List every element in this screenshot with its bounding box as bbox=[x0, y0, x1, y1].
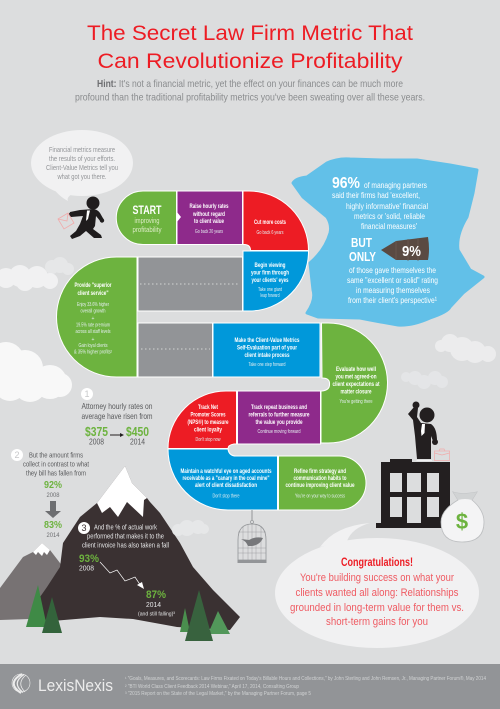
section 2: collected amount: 2 bbox=[14, 450, 20, 460]
row 1: start: without regard bbox=[192, 211, 225, 218]
subtitle hint: Hint: It's not a financial metric, yet the effect on your finances can be much more bbox=[97, 78, 403, 90]
row 5: final steps: alert of client dissatisfaction bbox=[195, 482, 257, 489]
row 1: start: improving bbox=[134, 216, 160, 225]
speech bubble: financial metrics: Financial metrics measure bbox=[49, 145, 115, 154]
section 2: collected amount: 83% bbox=[44, 520, 62, 531]
icon: law firm building bbox=[376, 459, 452, 528]
speech bubble: financial metrics: what got you there. bbox=[57, 172, 106, 181]
row 5: final steps: communication habits to bbox=[294, 475, 347, 482]
clouds right bbox=[401, 334, 496, 389]
row 5: final steps: Refine firm strategy and bbox=[294, 468, 346, 475]
row 2: grey spaces and client value: your firm through bbox=[251, 270, 289, 276]
speech bubble: congratulations: You're building success on what your bbox=[300, 572, 454, 584]
blue callout blob bbox=[293, 159, 483, 325]
row 2: grey spaces and client value: client intake process bbox=[244, 352, 290, 359]
row 5: final steps bbox=[168, 449, 366, 510]
speech bubble: congratulations bbox=[275, 523, 479, 648]
row 1: start: Raise hourly rates bbox=[190, 203, 229, 210]
row 3: evaluate: you met agreed-on bbox=[336, 374, 377, 380]
speech bubble: congratulations: grounded in long-term value for them vs. bbox=[290, 602, 464, 614]
mountains bbox=[0, 466, 240, 630]
row 2: grey spaces and client value: Gain loyal clients bbox=[78, 343, 108, 349]
row 4: track metrics: the value you provide bbox=[256, 419, 303, 426]
row 5: final steps: receivable as a "canary in the coal mine" bbox=[182, 475, 270, 482]
row 1: start: to client value bbox=[194, 218, 224, 225]
speech bubble: congratulations: Congratulations! bbox=[341, 555, 413, 569]
row 2: grey spaces and client value: & 35% higher profits² bbox=[74, 350, 112, 356]
9% statistic text: in measuring themselves bbox=[356, 285, 430, 295]
row 2: grey spaces and client value: Take one step forward bbox=[248, 362, 286, 368]
section 3: realization rate: 2008 bbox=[79, 564, 94, 572]
row 3: evaluate: You're getting there bbox=[340, 399, 373, 405]
section 3: realization rate: 2014 bbox=[146, 600, 161, 609]
footnotes: ² "BTI World Class Client Feedback 2014 Webinar," April 17, 2014, Consulting Group bbox=[125, 684, 299, 690]
icon: triumphant businessman bbox=[408, 402, 450, 461]
section 3: realization rate: client invoice has also taken a fall bbox=[82, 540, 169, 550]
96% statistic text: 96% bbox=[332, 175, 360, 192]
speech bubble: financial metrics: the results of your efforts. bbox=[49, 154, 115, 163]
section 2: collected amount: 2014 bbox=[46, 532, 60, 539]
row 1: start: Go back 20 years bbox=[195, 229, 223, 235]
96% statistic text: said their firms had 'excellent, bbox=[332, 190, 420, 200]
row 2: grey spaces and client value: your clients' eyes bbox=[252, 277, 289, 284]
row 3: evaluate: client expectations at bbox=[332, 381, 380, 388]
logo: LexisNexis bbox=[12, 674, 113, 695]
icon: trees bbox=[26, 585, 230, 641]
row 2: grey spaces and client value: Make the Client-Value Metrics bbox=[234, 337, 300, 344]
subtitle hint bbox=[75, 78, 425, 104]
9% statistic text bbox=[347, 265, 438, 305]
cloud on mountain bbox=[172, 520, 209, 536]
speech bubble: financial metrics bbox=[31, 130, 133, 201]
clouds left bbox=[0, 257, 74, 402]
row 1: start: START bbox=[132, 203, 162, 217]
section 1: attorney hourly rates: average have risen from bbox=[82, 411, 152, 421]
section 1: attorney hourly rates: $375 bbox=[85, 425, 108, 439]
row 4: track metrics: Track Net bbox=[198, 404, 218, 411]
row 2: grey spaces and client value: Begin viewing bbox=[254, 262, 286, 269]
row 2: grey spaces and client value: Provide "superior bbox=[74, 282, 112, 289]
row 2: grey spaces and client value: Take one giant bbox=[258, 287, 282, 293]
section 2: collected amount bbox=[11, 449, 90, 539]
section 3: realization rate bbox=[78, 522, 175, 618]
row 5: final steps: Maintain a watchful eye on aged accounts bbox=[180, 468, 272, 475]
row 4: track metrics: referrals to further measure bbox=[248, 412, 310, 418]
row 5: final steps: continue improving client value bbox=[286, 482, 355, 489]
row 2: grey spaces and client value: 19.5% rate premium bbox=[76, 322, 110, 328]
row 1: start bbox=[116, 191, 308, 250]
96% statistic text bbox=[332, 175, 428, 231]
row 5: final steps: You're on your way to success bbox=[295, 494, 345, 500]
title: Can Revolutionize Profitability bbox=[98, 50, 403, 73]
footnotes bbox=[125, 675, 486, 697]
row 2: grey spaces and client value: + bbox=[92, 337, 95, 343]
section 2: collected amount: But the amount firms bbox=[29, 450, 83, 460]
section 2: collected amount: they bill has fallen from bbox=[26, 468, 86, 478]
icon: money bag: $ bbox=[456, 509, 468, 534]
section 1: attorney hourly rates: 2008 bbox=[89, 438, 104, 446]
row 2: grey spaces and client value: Self-Evaluation part of your bbox=[237, 344, 297, 352]
row 2: grey spaces and client value: leap forward bbox=[260, 293, 280, 299]
9% statistic text: of those gave themselves the bbox=[349, 265, 436, 275]
section 3: realization rate: 93% bbox=[79, 553, 99, 565]
96% statistic text: financial measures' bbox=[361, 221, 417, 231]
footer bbox=[0, 664, 500, 709]
icon: running businessman with briefcase bbox=[58, 196, 104, 239]
row 1: start: Cut more costs bbox=[254, 219, 286, 226]
game board path bbox=[56, 191, 388, 510]
row 1: start: profitability bbox=[132, 225, 162, 234]
small grey mountain bbox=[0, 543, 75, 620]
row 2: grey spaces and client value: client service" bbox=[78, 290, 109, 297]
speech bubble: congratulations: short-term gains for you bbox=[326, 616, 428, 628]
section 1: attorney hourly rates: Attorney hourly rates on bbox=[82, 401, 153, 411]
row 4: track metrics: Don't stop now bbox=[196, 437, 221, 443]
row 3: evaluate bbox=[321, 323, 388, 443]
96% statistic text: of managing partners bbox=[364, 180, 427, 190]
icon: 9% pointer badge: 9% bbox=[402, 243, 421, 260]
section 3: realization rate: 87% bbox=[146, 589, 166, 601]
row 4: track metrics bbox=[168, 391, 320, 448]
96% statistic text: metrics or 'solid, reliable bbox=[354, 211, 425, 221]
row 3: evaluate: matter closure bbox=[340, 388, 372, 396]
section 1: attorney hourly rates bbox=[81, 388, 153, 446]
9% statistic text: same "excellent or solid" rating bbox=[347, 275, 438, 285]
title: The Secret Law Firm Metric That bbox=[87, 22, 413, 45]
row 2: grey spaces and client value: + bbox=[92, 316, 95, 322]
row 2: grey spaces and client value bbox=[56, 251, 320, 377]
row 4: track metrics: Continue moving forward bbox=[258, 429, 301, 435]
section 1: attorney hourly rates: 1 bbox=[84, 389, 90, 399]
but only label: ONLY bbox=[349, 249, 376, 264]
row 4: track metrics: client loyalty bbox=[194, 426, 222, 434]
section 2: collected amount: 92% bbox=[44, 480, 62, 491]
title bbox=[87, 22, 413, 73]
section 3: realization rate: (and still falling)³ bbox=[138, 612, 175, 618]
row 1: start: Go back 6 years bbox=[256, 230, 284, 236]
row 4: track metrics: Promoter Scores bbox=[190, 412, 226, 418]
but only label: BUT bbox=[351, 235, 372, 250]
96% statistic text: highly informative' financial bbox=[346, 201, 428, 211]
section 3: realization rate: And the % of actual work bbox=[94, 522, 157, 532]
row 2: grey spaces and client value: overall growth bbox=[80, 308, 106, 314]
footnotes: ³ "2015 Report on the State of the Legal Market," by the Managing Partner Forum, page 5 bbox=[125, 691, 311, 697]
row 4: track metrics: (NPS®) to measure bbox=[188, 419, 229, 426]
icon: birdcage bbox=[238, 510, 266, 563]
9% statistic text: from their client's perspective¹ bbox=[348, 295, 437, 305]
speech bubble: financial metrics: Client-Value Metrics tell you bbox=[46, 163, 118, 172]
subtitle hint: profound than the traditional profitability metrics you've been sweating over all these years. bbox=[75, 92, 425, 104]
row 2: grey spaces and client value: across all staff levels bbox=[76, 329, 111, 335]
row 3: evaluate: Evaluate how well bbox=[336, 366, 376, 373]
icon: money bag bbox=[441, 492, 484, 542]
logo: LexisNexis: LexisNexis bbox=[38, 676, 113, 695]
section 1: attorney hourly rates: 2014 bbox=[130, 438, 145, 446]
section 2: collected amount: collect in contrast to what bbox=[23, 460, 90, 468]
section 3: realization rate: performed that makes it to the bbox=[87, 532, 164, 540]
speech bubble: congratulations: clients wanted all along: Relationships bbox=[296, 587, 459, 599]
row 4: track metrics: Track repeat business and bbox=[251, 404, 307, 411]
row 5: final steps: Don't stop there bbox=[212, 494, 240, 500]
section 3: realization rate: 3 bbox=[81, 523, 87, 533]
section 2: collected amount: 2008 bbox=[46, 492, 60, 499]
row 2: grey spaces and client value: Enjoy 33.6% higher bbox=[77, 302, 109, 308]
large dark mountain bbox=[40, 466, 240, 630]
icon: 9% pointer badge bbox=[381, 237, 429, 261]
but only label bbox=[349, 235, 376, 264]
section 1: attorney hourly rates: $450 bbox=[126, 425, 149, 439]
